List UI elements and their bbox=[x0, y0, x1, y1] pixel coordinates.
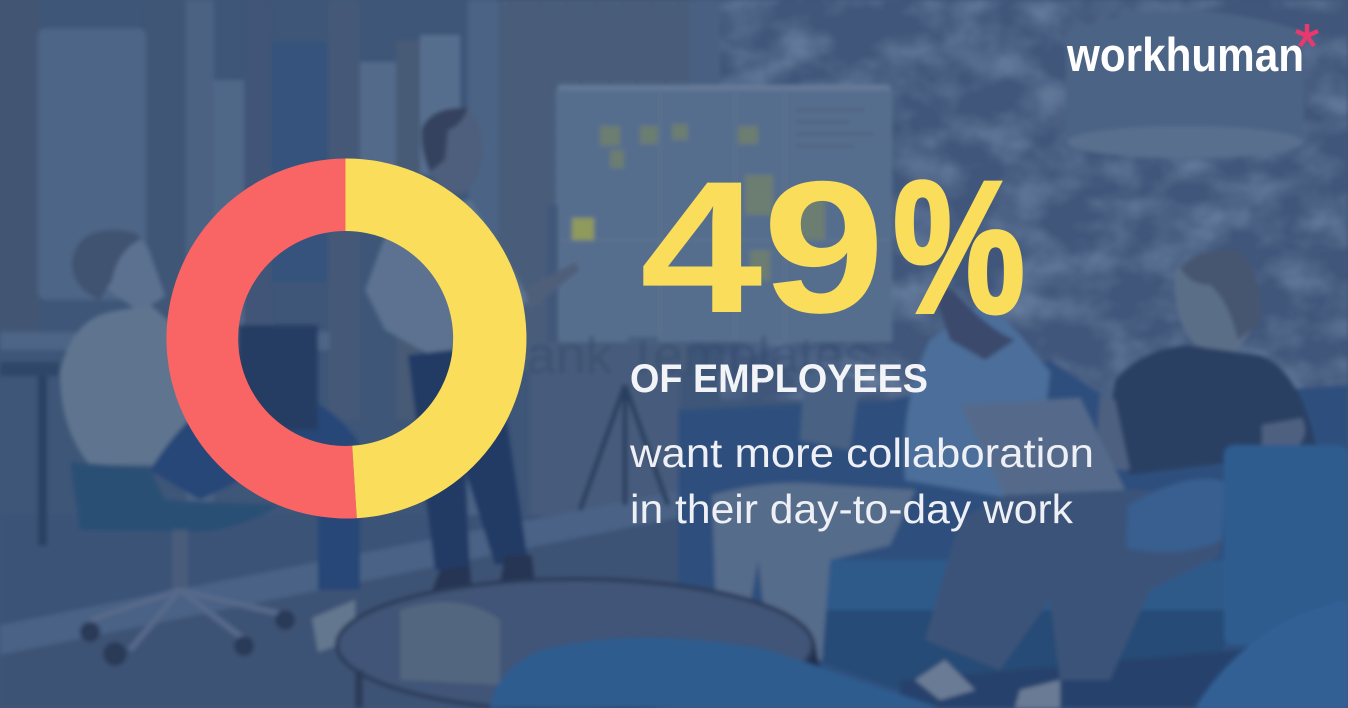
donut segment: remaining 51 percent bbox=[166, 158, 357, 518]
back wall left bbox=[0, 0, 498, 590]
coffee table and cushion bbox=[337, 579, 1348, 708]
description: in their day-to-day work bbox=[630, 486, 1074, 532]
office chair base bbox=[80, 530, 295, 666]
donut segment: 49 percent bbox=[346, 158, 526, 518]
presenter bbox=[365, 108, 580, 590]
big statistic: % bbox=[893, 142, 1025, 352]
big statistic: 49 bbox=[640, 142, 885, 352]
sofa bbox=[678, 360, 1348, 708]
description: want more collaboration bbox=[629, 430, 1094, 476]
floor and light strip bbox=[0, 515, 700, 708]
tripod bbox=[580, 385, 668, 510]
donut chart: 49 percent bbox=[166, 158, 526, 518]
seated person middle bbox=[712, 288, 1050, 670]
brick wall centre bbox=[498, 0, 690, 370]
workhuman logo: workhuman bbox=[1066, 28, 1304, 81]
seated man right bbox=[915, 250, 1316, 708]
seated man left bbox=[60, 230, 360, 652]
sofa arm and pillow bbox=[1126, 445, 1348, 645]
subheading: OF EMPLOYEES bbox=[630, 357, 928, 401]
whiteboard bbox=[546, 85, 892, 555]
description bbox=[629, 430, 1094, 532]
concrete wall right bbox=[720, 0, 1348, 400]
desk at left bbox=[0, 332, 330, 546]
watermark ghost text: ank Templates bbox=[526, 327, 871, 385]
lower wall behind sofa and tripod bbox=[530, 342, 680, 532]
ceiling lamp bbox=[1066, 11, 1304, 158]
icon: pink asterisk bbox=[1296, 24, 1318, 46]
